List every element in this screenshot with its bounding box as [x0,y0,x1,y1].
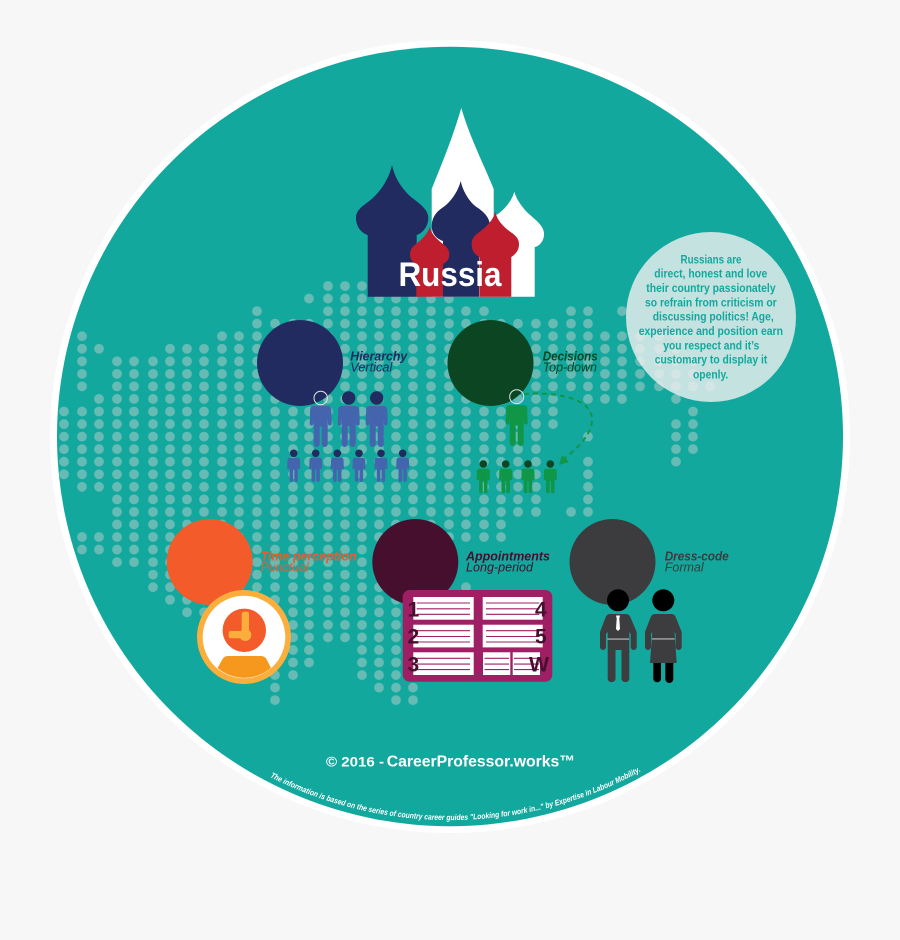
decisions label: Top-down [543,360,597,375]
icon: woman in suit [645,589,682,683]
time perception label: Punctual [261,560,310,575]
callout: about Russians: Russians are [680,254,742,266]
hierarchy label: Vertical [350,360,393,375]
arrow: decision flows down [524,394,592,465]
icon: six employees [287,450,409,482]
time perception label: Time perception [261,549,357,564]
appointments label [465,549,550,575]
icon: week planner: 5 [535,625,547,648]
icon: week planner: W [529,653,549,676]
appointments label: Appointments [465,549,550,564]
icon: onion-dome cathedral [356,108,544,297]
icon: decision maker [506,390,528,446]
appointments label: Long-period [466,560,534,575]
copyright line: © 2016 - [326,754,384,770]
dress-code label [665,549,729,575]
callout: about Russians: customary to display it [655,355,768,367]
decisions label [543,349,598,375]
appointments circle [372,519,458,605]
panel: appointments [372,519,552,682]
icon: man in suit [600,589,637,682]
source note on curve: The information is based on the series of country career guides "Looking for work in..." by Expertise in Labour Mobility. [271,768,640,822]
dress-code label: Dress-code [665,549,729,564]
callout: about Russians: openly. [693,369,728,381]
title: Russia [398,256,503,294]
icon: week planner: 2 [408,625,419,648]
callout: about Russians: so refrain from criticism or [645,297,777,309]
icon: three managers [310,391,388,447]
callout: about Russians: their country passionately [646,283,776,295]
background disc [50,40,850,833]
copyright line: CareerProfessor.works™ [387,754,575,771]
icon: week planner: 1 [408,599,420,622]
panel: decisions [448,320,598,493]
hierarchy label [350,349,408,375]
callout: about Russians [626,232,796,402]
time perception circle [167,519,253,605]
panel: time perception [167,519,357,684]
callout: about Russians: experience and position earn [639,326,783,338]
icon: week planner: 4 [535,599,547,622]
icon: week planner: 3 [408,653,419,676]
callout: about Russians: you respect and it’s [663,340,759,352]
hierarchy label: Hierarchy [350,349,408,364]
icon: clock head person [197,590,291,684]
time perception label [261,549,357,575]
panel: hierarchy [257,320,409,482]
hierarchy circle [257,320,343,406]
panel: dress-code [570,519,729,683]
icon: four employees [477,460,557,493]
decisions circle [448,320,534,406]
decisions label: Decisions [543,349,598,364]
dress-code label: Formal [665,560,705,575]
callout: about Russians: direct, honest and love [654,269,767,281]
dress-code circle [570,519,656,605]
icon: week planner [403,590,552,682]
callout: about Russians: discussing politics! Age, [653,312,774,324]
dotted world map [64,286,710,700]
